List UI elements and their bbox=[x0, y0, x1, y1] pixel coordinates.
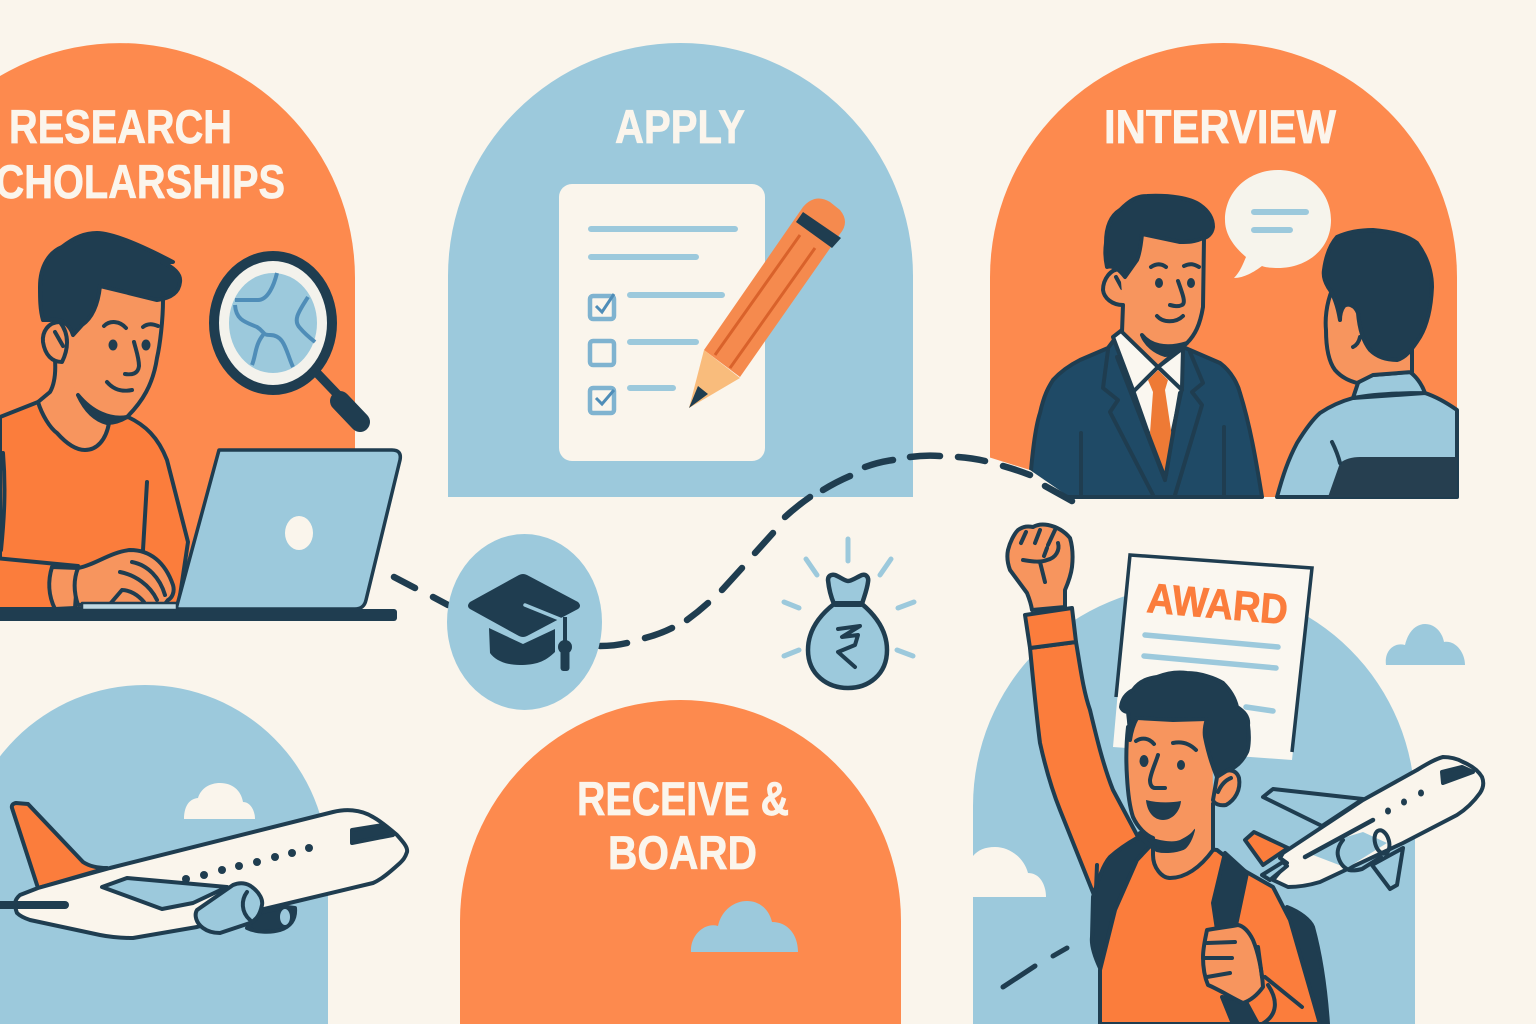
icon: airplane bbox=[0, 803, 407, 938]
strap bbox=[1213, 853, 1258, 1024]
panel: apply bbox=[448, 43, 913, 497]
person at laptop bbox=[0, 233, 188, 609]
award certificate: AWARD bbox=[1145, 574, 1290, 633]
dashed trail bbox=[1003, 948, 1067, 987]
collar and neck bbox=[1150, 795, 1213, 878]
shirt back bbox=[1277, 393, 1457, 497]
engine bbox=[1338, 840, 1381, 870]
tail fin bbox=[1245, 832, 1288, 865]
ear bbox=[1213, 770, 1239, 805]
heading: receive and board bbox=[577, 772, 789, 879]
heading: interview: INTERVIEW bbox=[1104, 100, 1337, 153]
hair bbox=[1324, 230, 1432, 360]
ear bbox=[43, 322, 67, 362]
collar bbox=[1353, 372, 1425, 398]
heading: apply: APPLY bbox=[615, 100, 745, 153]
neck and face bbox=[1120, 234, 1204, 367]
award certificate bbox=[1113, 555, 1312, 760]
hair bbox=[1121, 672, 1249, 777]
heading: research scholarships: RESEARCH bbox=[9, 100, 232, 153]
heading: receive and board: BOARD bbox=[608, 826, 757, 879]
tie bbox=[1148, 370, 1172, 475]
icon: cloud bbox=[1386, 624, 1465, 665]
hair bbox=[1105, 196, 1213, 277]
hand on strap bbox=[1203, 925, 1263, 1003]
icon: graduation cap badge bbox=[447, 534, 602, 710]
interviewee seen from behind bbox=[1277, 230, 1457, 497]
open mouth bbox=[1146, 800, 1181, 820]
stabilizer bbox=[1262, 862, 1287, 880]
icon: cloud bbox=[691, 901, 798, 952]
face bbox=[66, 286, 163, 421]
interviewer in suit bbox=[1029, 196, 1262, 497]
face bbox=[1126, 706, 1213, 841]
suit jacket bbox=[1029, 332, 1262, 497]
icon: laptop bbox=[0, 450, 400, 621]
lower fin bbox=[1372, 848, 1403, 889]
lapels bbox=[1081, 350, 1224, 497]
facial features bbox=[108, 340, 118, 350]
facial features bbox=[1140, 755, 1148, 767]
icon: rupee money bag bbox=[784, 539, 914, 688]
backpack left bbox=[1092, 838, 1153, 968]
neck bbox=[38, 340, 120, 450]
cockpit bbox=[1442, 767, 1473, 783]
ear bbox=[1103, 269, 1123, 305]
heading: research scholarships bbox=[0, 100, 285, 208]
panel: plane arch bbox=[0, 685, 407, 1024]
fist bbox=[1007, 524, 1073, 610]
fuselage bbox=[1273, 757, 1483, 887]
dashed journey path bbox=[394, 456, 1072, 646]
icon: pencil bbox=[689, 198, 845, 408]
windows bbox=[1385, 790, 1424, 814]
icon: cloud bbox=[184, 783, 255, 819]
torso bbox=[1100, 843, 1320, 1024]
cream cut around the path bbox=[985, 456, 1078, 503]
icon: magnifying glass with map bbox=[214, 256, 360, 422]
panel: interview bbox=[985, 43, 1457, 503]
person celebrating bbox=[1007, 524, 1328, 1024]
shirt collar bbox=[1113, 330, 1183, 475]
upper wing bbox=[1263, 789, 1363, 826]
raised arm bbox=[1030, 642, 1145, 900]
speech bubble bbox=[1225, 170, 1331, 278]
sleeve and cuff bbox=[0, 558, 78, 609]
lower wing bbox=[1313, 832, 1387, 868]
chair back bbox=[1328, 457, 1457, 497]
icon: cloud bbox=[973, 847, 1046, 897]
shirt detail bbox=[1, 453, 147, 550]
heading: receive and board: RECEIVE & bbox=[577, 772, 789, 825]
checklist document bbox=[559, 184, 765, 461]
panel: research scholarships bbox=[0, 43, 400, 621]
shirt bbox=[0, 402, 188, 609]
hair bbox=[40, 233, 180, 335]
panel: award arch bbox=[973, 524, 1483, 1024]
facial features bbox=[1155, 278, 1163, 288]
panel: receive and board bbox=[460, 700, 901, 1024]
backpack right bbox=[1280, 907, 1328, 1024]
neck and head bbox=[1326, 290, 1412, 383]
icon: airplane taking off bbox=[1245, 757, 1483, 889]
hand bbox=[75, 550, 174, 605]
